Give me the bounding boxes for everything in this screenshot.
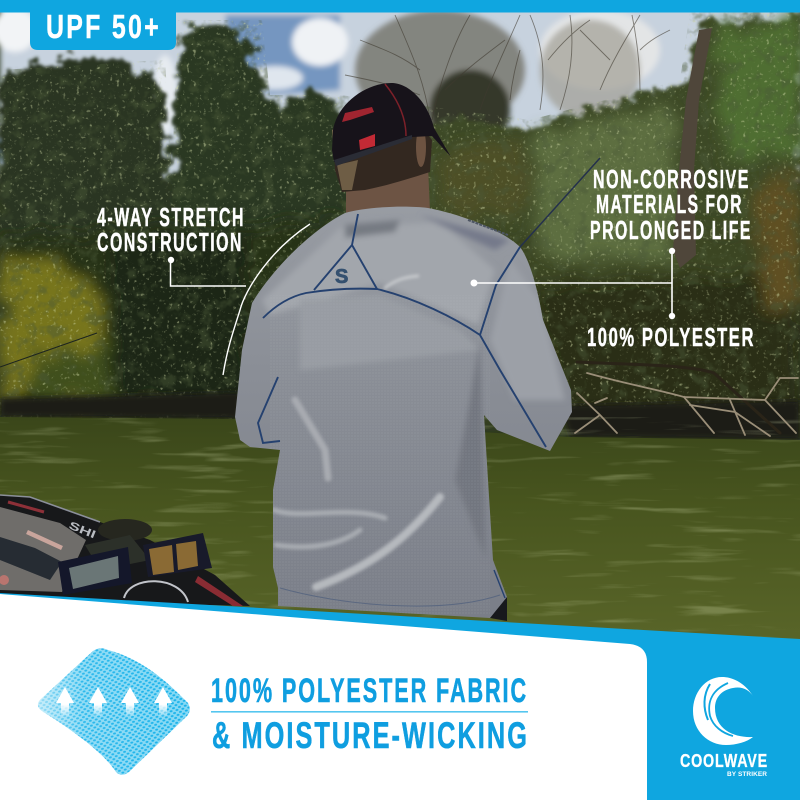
heading: polyester fabric and moisture-wicking: & MOISTURE-WICKING — [212, 715, 529, 756]
gauge screens — [58, 547, 132, 595]
shirt seams — [258, 214, 546, 606]
photo: boat with electronics — [0, 495, 250, 606]
photo: boat with electronics: SHI — [67, 520, 97, 541]
badge: UPF 50+ — [30, 0, 176, 50]
cap — [332, 83, 451, 162]
neck and head — [346, 165, 430, 216]
tree crowns upper — [0, 15, 800, 300]
distant fishing line — [0, 333, 97, 367]
callout: 4-way stretch construction: CONSTRUCTION — [97, 227, 243, 257]
logo: coolwave by striker: COOLWAVE — [680, 751, 768, 771]
brand print on shoulder — [468, 220, 508, 235]
shirt highlights — [262, 215, 565, 560]
callout: non-corrosive materials — [590, 164, 752, 254]
tree masses — [0, 15, 800, 425]
foliage speckle — [0, 0, 800, 420]
mesh texture — [270, 295, 490, 615]
bare tree crowns — [355, 10, 640, 150]
logo: coolwave by striker: BY STRIKER — [727, 771, 767, 778]
photo: fishing rod — [520, 158, 600, 247]
wave mark — [693, 677, 753, 745]
shirt — [235, 207, 572, 620]
callout leader: shirt dot — [470, 280, 672, 286]
triangle logo: S — [335, 266, 348, 288]
pants below hem — [490, 597, 507, 621]
heading: polyester fabric and moisture-wicking — [211, 672, 529, 756]
fallen branches — [575, 362, 798, 436]
arrows — [56, 687, 74, 716]
callout: 4-way stretch construction: 4-WAY STRETCH — [97, 202, 245, 232]
bottom white panel — [0, 594, 647, 800]
dead tree trunk — [673, 28, 712, 268]
heading: polyester fabric and moisture-wicking: 100% POLYESTER FABRIC — [211, 672, 528, 710]
badge: UPF 50+: UPF 50+ — [46, 8, 161, 45]
water — [0, 417, 800, 650]
callout: 100% polyester — [587, 251, 755, 352]
callout: 4-way stretch construction — [97, 202, 310, 375]
logo: coolwave by striker — [680, 677, 768, 778]
sky — [0, 0, 800, 180]
shoreline — [0, 392, 800, 440]
top bar — [0, 0, 800, 12]
icon: moisture-wicking fabric — [38, 648, 190, 775]
man: back view wearing shirt — [235, 83, 572, 621]
bare branches — [345, 15, 670, 120]
bottom blue panel — [0, 593, 800, 800]
fabric folds — [274, 276, 440, 587]
